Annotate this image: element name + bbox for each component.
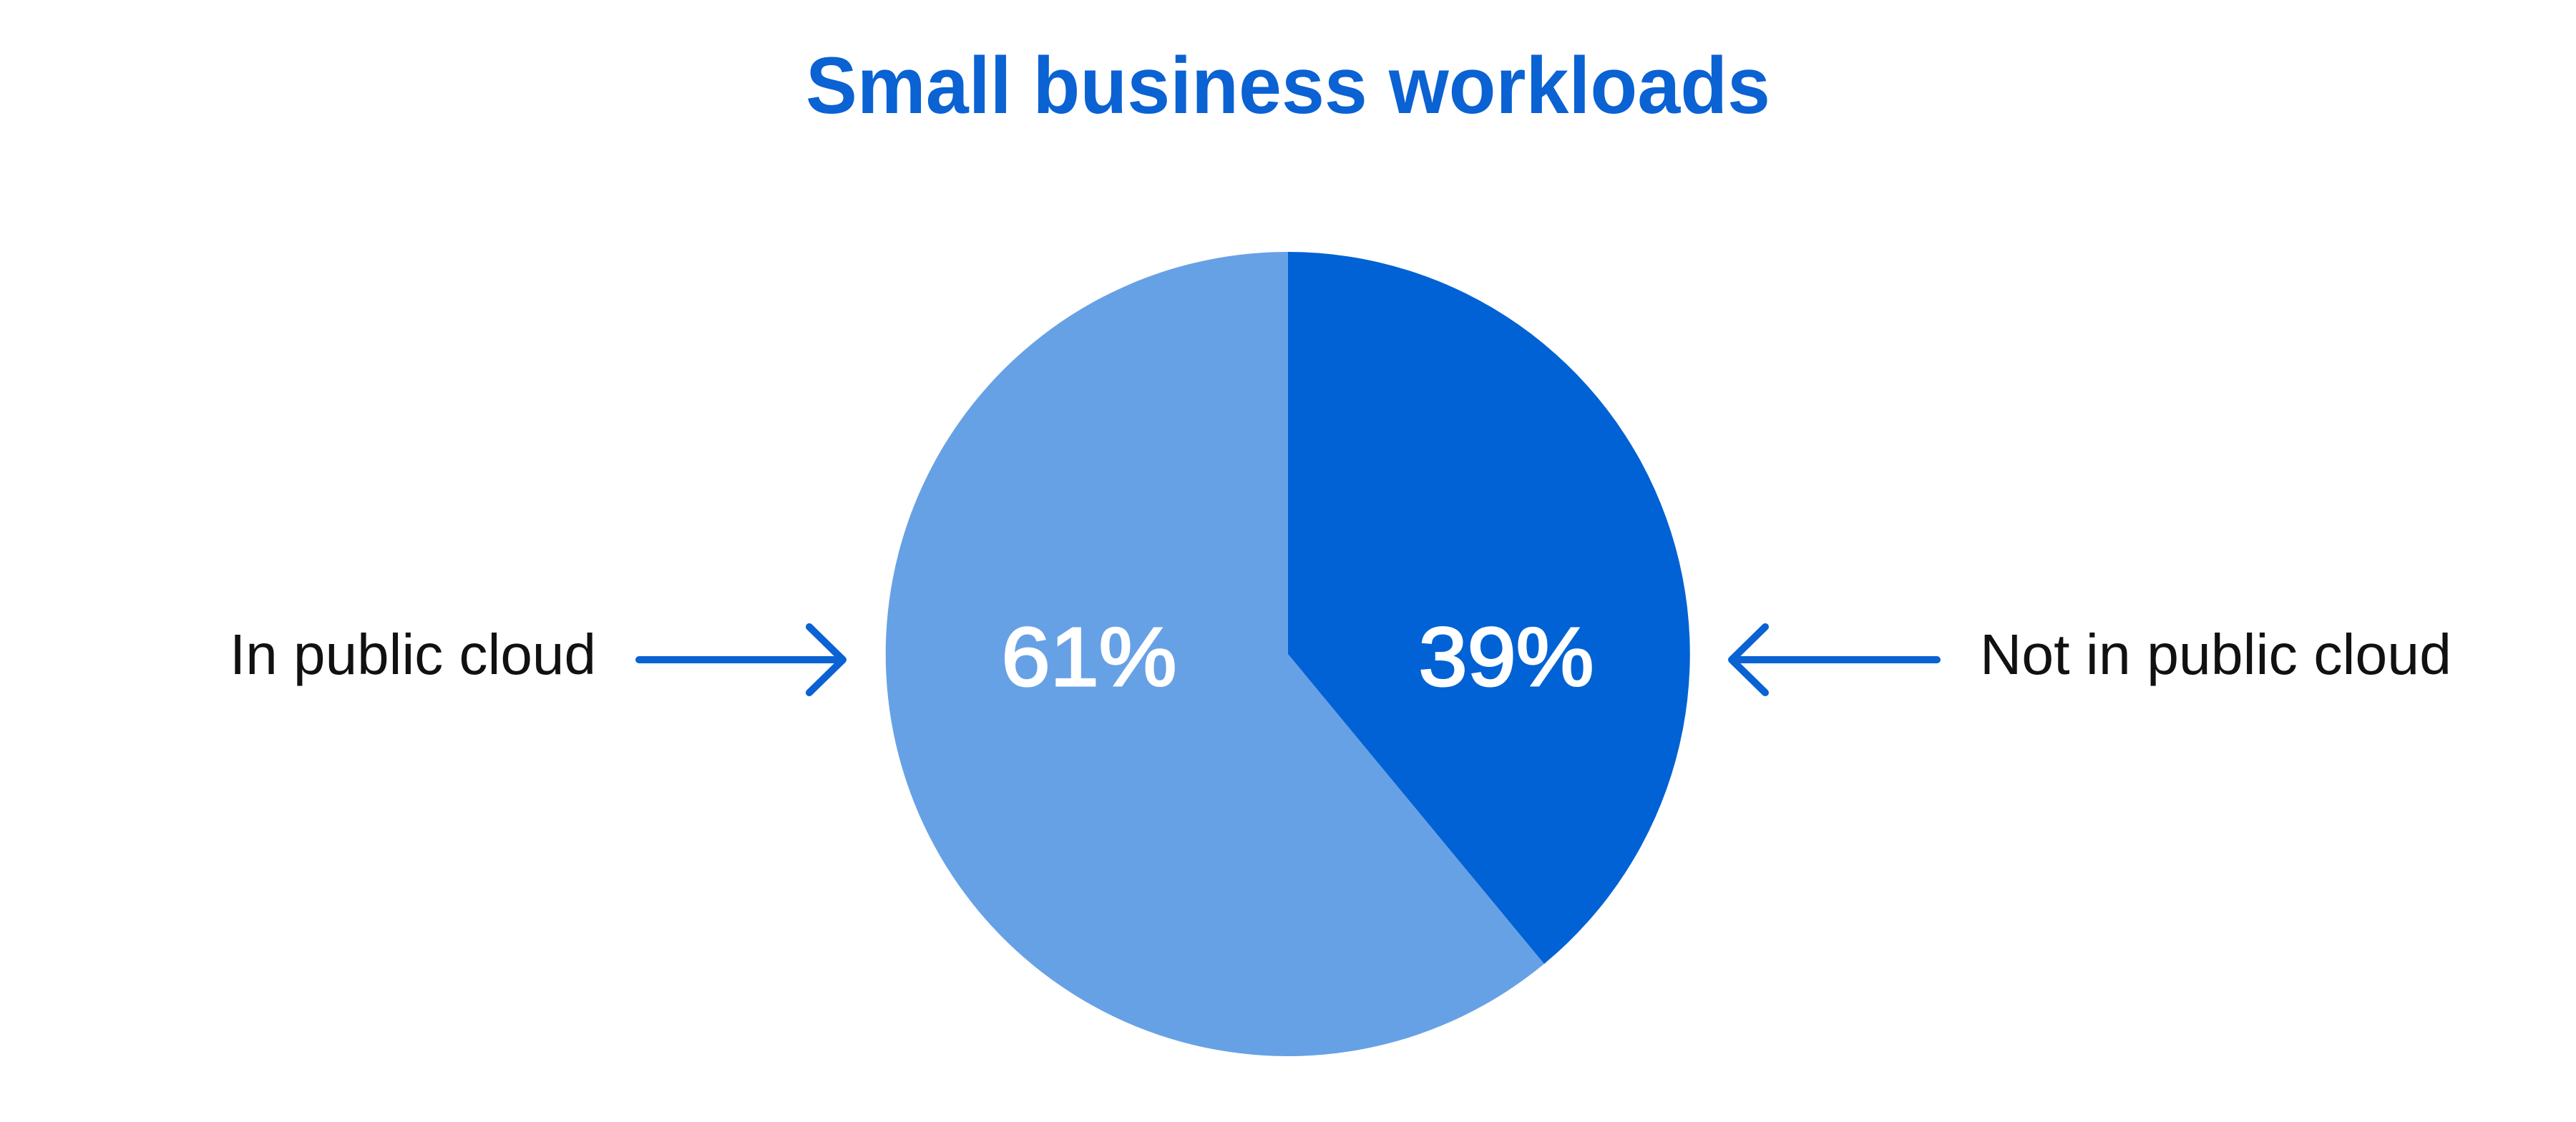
title: Small business workloads: [806, 41, 1770, 130]
value: 39%: 39%: [1418, 610, 1594, 703]
pie chart: [886, 252, 1690, 1056]
value: 61%: 61%: [1002, 610, 1176, 703]
label: in public cloud: In public cloud: [230, 623, 596, 686]
label: not in public cloud: Not in public cloud: [1980, 623, 2451, 686]
arrow: right pointing to pie: [1732, 627, 1937, 693]
slice: in public cloud 61%: [886, 252, 1544, 1056]
arrow: left pointing to pie: [639, 627, 843, 693]
slice: not in public cloud 39%: [1288, 252, 1690, 964]
